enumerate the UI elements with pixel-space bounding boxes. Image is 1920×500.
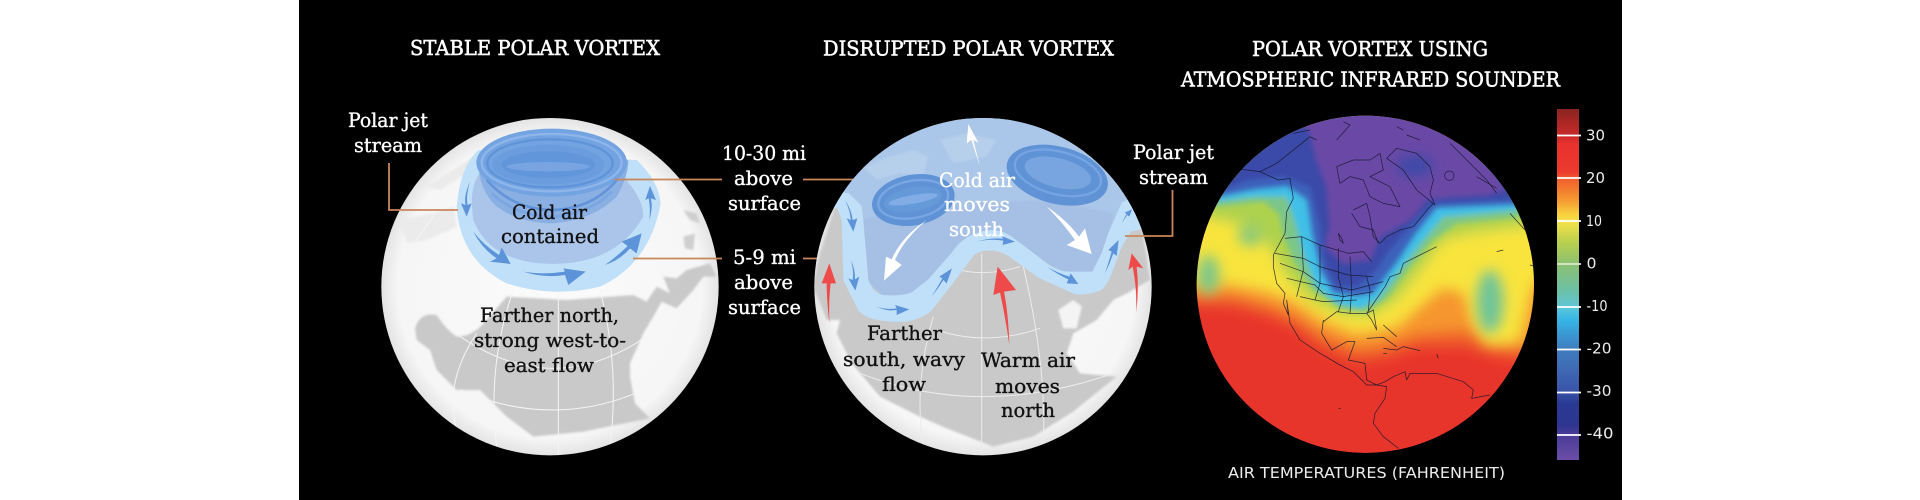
map outlines: coastlines and state lines (1220, 122, 1533, 448)
colour scale legend: -10 (1586, 297, 1608, 315)
red arrows: warm air moving north (822, 253, 1143, 345)
text: farther north: Farther north, (480, 303, 619, 327)
text: cold air contained (501, 200, 599, 248)
colour scale legend: -30 (1586, 382, 1612, 400)
panel: disrupted polar vortex (800, 36, 1214, 455)
text: cold air moves south (939, 168, 1015, 241)
white arrows: cold air moving (884, 124, 1092, 281)
text: farther north: east flow (504, 353, 594, 377)
heading: polar vortex using atmospheric infrared sounder: ATMOSPHERIC INFRARED SOUNDER (1180, 68, 1561, 92)
label: polar jet stream left (348, 108, 428, 157)
text: cold air contained: Cold air (512, 200, 587, 224)
cold air bowl (472, 173, 643, 264)
cold air bowl (870, 264, 1058, 295)
text: farther south, wavy flow: flow (882, 372, 926, 396)
panel: stable polar vortex (348, 36, 719, 455)
label: polar jet stream right (1133, 140, 1214, 189)
colour scale legend: -20 (1586, 340, 1612, 358)
colour scale legend: -40 (1586, 424, 1614, 442)
text: warm air moves north: moves (995, 374, 1060, 398)
text: cold air moves south: moves (944, 192, 1010, 216)
text: cold air contained: contained (501, 224, 599, 248)
label: 5-9 mi above surface: 5-9 mi (733, 245, 796, 269)
colour scale legend: 10 (1586, 212, 1602, 230)
globe: disrupted vortex illustration (814, 118, 1152, 456)
heat map globe (1196, 116, 1534, 453)
label: 10-30 mi above surface: 10-30 mi (722, 141, 806, 165)
cold air overlay, top of globe (842, 118, 1128, 296)
heading: disrupted polar vortex: DISRUPTED POLAR VORTEX (823, 36, 1114, 60)
colour scale legend: 30 (1586, 126, 1605, 144)
label: 5-9 mi above surface (728, 245, 801, 319)
vortex rings (476, 129, 628, 223)
jet stream arrows (461, 182, 656, 285)
colour scale legend (1557, 109, 1614, 460)
leader line: polar jet stream right (1125, 190, 1172, 236)
blue arrows: jet stream (845, 200, 1132, 315)
jet stream band (457, 150, 661, 292)
text: cold air moves south: Cold air (939, 168, 1015, 192)
label: 5-9 mi above surface: above (734, 270, 793, 294)
text: warm air moves north: north (1001, 398, 1055, 422)
label: 10-30 mi above surface (722, 141, 806, 215)
heading: stable polar vortex: STABLE POLAR VORTEX (410, 36, 660, 60)
text: farther north: strong west-to- (474, 328, 626, 352)
colour scale legend: 20 (1586, 169, 1605, 187)
caption: air temperatures: AIR TEMPERATURES (FAHRENHEIT) (1228, 464, 1505, 482)
label: polar jet stream left: stream (354, 133, 422, 157)
label: 10-30 mi above surface: above (734, 166, 793, 190)
jet stream band (823, 193, 1147, 320)
black background panel (299, 0, 1622, 500)
label: polar jet stream right: stream (1139, 165, 1208, 189)
text: farther south, wavy flow: Farther (867, 321, 942, 345)
shared altitude labels (615, 141, 912, 319)
text: warm air moves north: Warm air (981, 348, 1075, 372)
text: warm air moves north (981, 348, 1075, 422)
label: 5-9 mi above surface: surface (728, 295, 801, 319)
label: 10-30 mi above surface: surface (728, 191, 801, 215)
colour scale legend: 0 (1586, 254, 1596, 272)
text: farther north (474, 303, 626, 377)
right vortex (1000, 135, 1114, 215)
leader line: polar jet stream left (389, 163, 458, 210)
text: cold air moves south: south (949, 217, 1004, 241)
label: polar jet stream right: Polar jet (1133, 140, 1214, 164)
label: polar jet stream left: Polar jet (348, 108, 428, 132)
heading: polar vortex using atmospheric infrared sounder (1180, 37, 1561, 92)
leader lines: altitude (615, 180, 912, 258)
left vortex (868, 168, 959, 232)
text: farther south, wavy flow (843, 321, 966, 396)
globe: stable vortex illustration (381, 118, 719, 455)
panel: atmospheric infrared sounder (1180, 40, 1612, 480)
heading: polar vortex using atmospheric infrared sounder: POLAR VORTEX USING (1252, 37, 1488, 61)
text: farther south, wavy flow: south, wavy (843, 347, 966, 371)
